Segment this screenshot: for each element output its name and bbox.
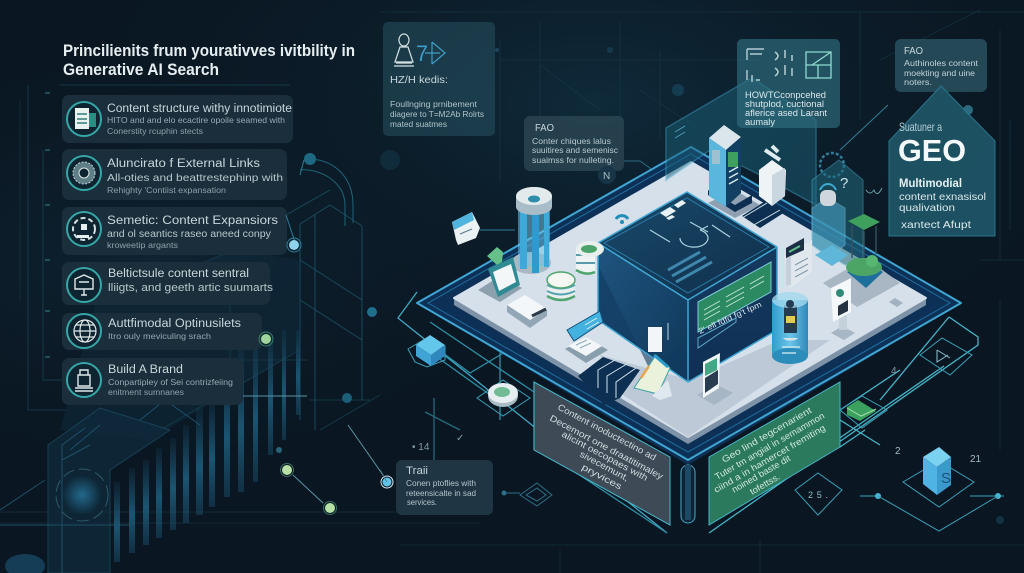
card 1: content structure: Content structure withy innotimiote (107, 103, 292, 115)
panel: card list (62, 95, 293, 405)
card 6: build a brand: enitment sumnanes (108, 388, 184, 397)
card 3: semantic content: kroweetip argants (107, 241, 178, 250)
house panel: GEO (889, 86, 995, 236)
small numbers: 4 (891, 366, 897, 377)
center pillar (681, 465, 695, 523)
card 1: content structure (62, 95, 293, 143)
card 2: external links: Rehighty 'Contiist expansation (107, 186, 226, 195)
panel: trail: Traii (406, 465, 428, 477)
panel: top left stat (383, 22, 495, 136)
printer box (507, 295, 547, 328)
card 5: multimodal: Itro ouly meviculing srach (108, 331, 211, 341)
right hexagon icons (795, 338, 972, 515)
small numbers (412, 366, 982, 465)
connector nodes (243, 153, 393, 514)
glass cylinder (511, 187, 552, 274)
disk stacks (547, 241, 604, 300)
card 4: central insights: Beltictsule content sentral (108, 268, 249, 280)
base frame lines (398, 292, 978, 533)
doc card floating (452, 212, 515, 245)
card 2: external links: All-oties and beattrestephinp with (107, 172, 283, 184)
card 3: semantic content: Semetic: Content Expansiors (107, 215, 278, 227)
box with screen (784, 238, 812, 288)
notch with cables: back (742, 200, 785, 228)
light platform (454, 162, 926, 444)
outer platform (417, 147, 961, 465)
small numbers: • 14 (412, 442, 430, 453)
panel: green text face (709, 382, 840, 525)
panel: FAQ top right (895, 39, 987, 92)
panel: FAQ top right: moekting and uine (904, 68, 975, 78)
card 3: semantic content (62, 207, 287, 255)
small numbers: ✓ (456, 433, 464, 444)
cube front: green screen: 2' ell fdfd fg't fpm (697, 300, 763, 336)
cube side: note (648, 323, 668, 352)
house icon with lock (812, 160, 882, 266)
panel: heading (63, 42, 355, 79)
panel: FAQ middle: FAO (535, 122, 554, 134)
panel: heading: Generative AI Search (63, 61, 219, 79)
panel: trail: services. (407, 497, 437, 507)
calendar booklet (634, 355, 672, 400)
panel: top left stat: 7 (416, 41, 428, 66)
plate with green plant (823, 255, 900, 307)
green roof stand (848, 214, 880, 262)
house icon with lock: ? (840, 175, 848, 192)
panel: HOW-TO text: HOWTCconpcehed (745, 90, 826, 100)
panel: FAQ middle: Conter chiques lalus (532, 136, 611, 146)
card 1: content structure: HITO and and elo ecactire opoile seamed with (107, 115, 285, 125)
panel: green text face: ciind a in hamercet fremiting (712, 423, 827, 495)
open laptop device (565, 311, 608, 363)
panel: gray text face: sivecemunt, (578, 449, 630, 483)
house panel: GEO: GEO (898, 133, 966, 168)
card 5: multimodal (62, 313, 262, 350)
card 2: external links: Aluncirato f External Links (107, 158, 260, 170)
panel: green text face: Geo lind tegcenarient (720, 405, 814, 465)
card 6: build a brand: Build A Brand (108, 364, 183, 376)
panel: FAQ middle: N (603, 171, 610, 182)
small chip (889, 298, 903, 307)
panel: HOW-TO text: aflerice ased Larant (745, 108, 828, 118)
server tower (708, 125, 760, 218)
panel: HOW-TO text: shutplod, cuctional (745, 99, 824, 109)
panel: HOW-TO text (737, 39, 840, 128)
panel: FAQ middle (524, 116, 650, 185)
card 1: content structure: Conerstity rcuphin stects (107, 127, 203, 136)
left background: isometric data block with bars (0, 330, 300, 573)
phone kiosk front (697, 353, 733, 405)
house panel: GEO: content exnasisol (899, 191, 986, 203)
disc icon (477, 380, 530, 416)
right hexagon icons: 25. (808, 490, 828, 500)
card 4: central insights (62, 262, 274, 305)
blue cylinder (772, 292, 808, 364)
panel: FAQ top right: FAO (904, 46, 923, 57)
panel: top left stat: diagere to T=M2Ab Rolrts (390, 109, 484, 119)
panel: gray text face: Content inoductectino ad (556, 402, 658, 462)
panel: trail (380, 460, 493, 515)
cube (598, 192, 777, 382)
isometric blue stack icon (860, 447, 1004, 531)
house panel: HOW-TO (666, 78, 816, 205)
card 4: central insights: lliigts, and geeth artic suumarts (108, 282, 274, 294)
kiosk phone (831, 278, 855, 340)
panel: gray text face: Decemort one draatitimaley (548, 413, 665, 482)
ring icon lower (502, 483, 552, 506)
notch with cables: front (578, 357, 640, 405)
document jar icon (759, 146, 786, 206)
panel: trail: reteensicalte in sad (406, 488, 476, 498)
panel: heading: Princilienits frum yourativves ivitbility in (63, 42, 355, 60)
small numbers: 2 (895, 446, 901, 457)
panel: gray text face (534, 382, 670, 525)
small numbers: 21 (970, 454, 982, 465)
panel: green text face: tofettss. (748, 472, 782, 497)
panel: top left stat: mated suatmes (390, 119, 447, 129)
house panel: GEO: Multimodial (899, 176, 962, 190)
small blue cube (408, 335, 445, 367)
wifi marker (616, 216, 628, 224)
card 3: semantic content: and ol seantics raseo aneed conpy (107, 229, 271, 240)
panel: FAQ top right: noters. (904, 77, 932, 87)
panel: gray text face: pryvices (580, 462, 624, 492)
cube top: logo marks (650, 200, 730, 282)
panel: FAQ middle: suuitires and semenisc (532, 145, 619, 155)
panel: green text face: noined baste dit (730, 453, 793, 495)
house panel: GEO: xantect Afupt (901, 220, 971, 231)
panel: HOW-TO text: aumaly (745, 117, 776, 127)
card 6: build a brand (62, 358, 243, 405)
isometric blue stack icon: S (941, 470, 951, 487)
card 2: external links (62, 149, 287, 200)
panel: green text face: Tuter tm angial in semammon (713, 411, 826, 482)
house panel: GEO: qualivation (899, 202, 955, 214)
panel: gray text face: alicint oecopaes with (560, 429, 650, 483)
cube front: green screen (697, 262, 771, 348)
panel: trail: Conen ptoflies with (406, 478, 476, 488)
card 5: multimodal: Auttfimodal Optinusilets (108, 318, 241, 330)
left background: server arch and rails (28, 85, 380, 440)
connector to FAQ and gear icon (820, 105, 973, 177)
green leaf and monitor (478, 247, 522, 302)
panel: FAQ middle: suaimss for nulleting. (532, 155, 614, 165)
panel: FAQ top right: Authinoles content (904, 58, 979, 68)
panel: top left stat: Foullnging prnibement (390, 99, 478, 109)
card 6: build a brand: Conpartipley of Sei contrizfeiing (108, 377, 233, 387)
panel: top left stat: HZ/H kedis: (390, 74, 448, 86)
house panel: GEO: Suatuner a (899, 120, 942, 134)
